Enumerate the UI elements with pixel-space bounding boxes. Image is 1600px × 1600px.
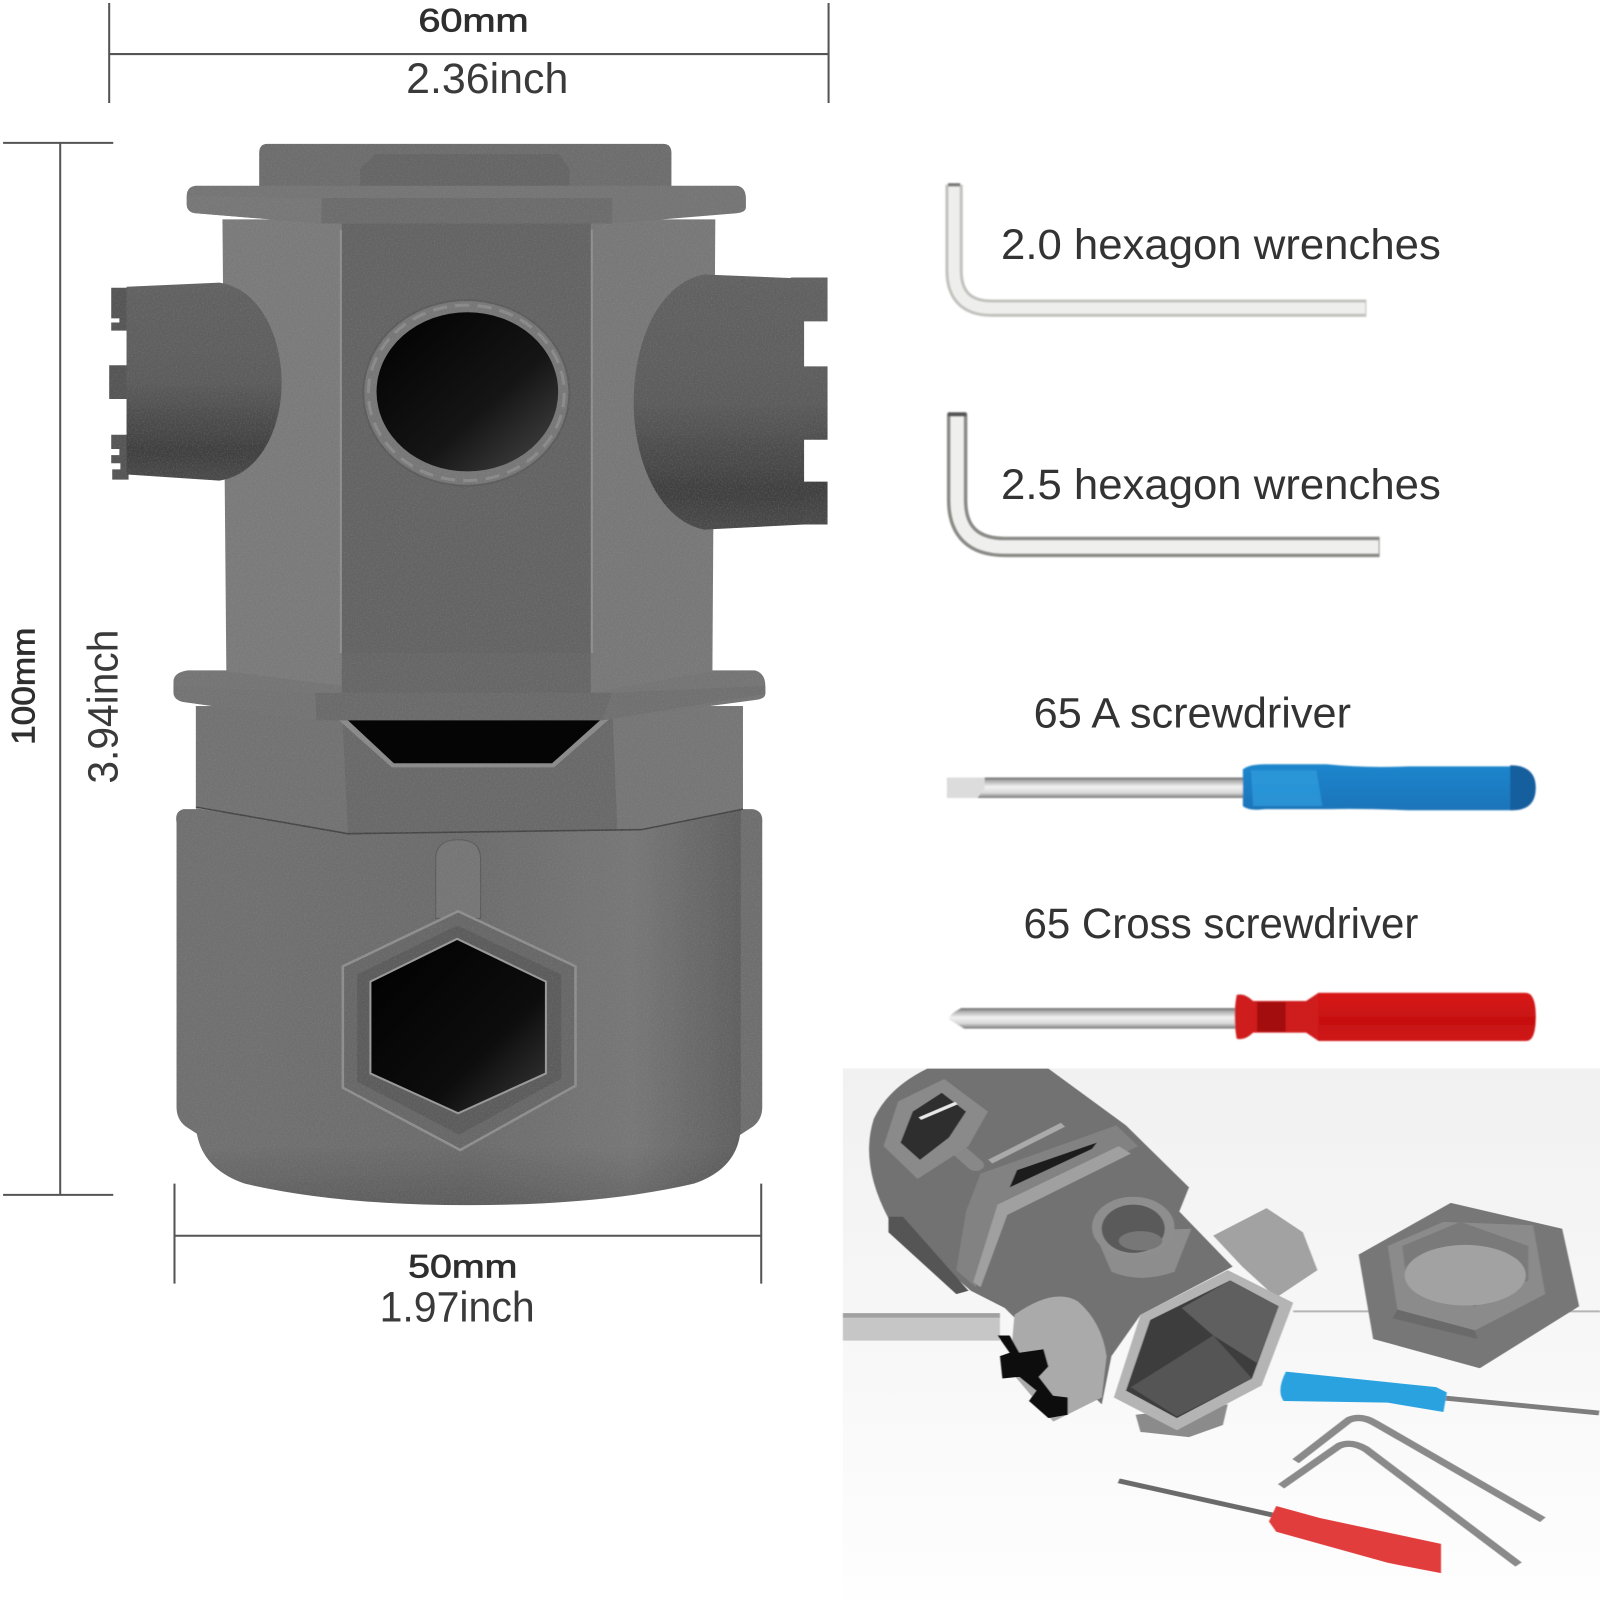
hexagon socket opening <box>370 939 546 1113</box>
label: 1.97inch: 1.97inch <box>380 1283 535 1331</box>
upper flange <box>187 186 746 223</box>
label: 65 Cross screwdriver: 65 Cross screwdriver <box>1023 900 1418 948</box>
photo inset: tool and accessories on white surface <box>843 1068 1600 1600</box>
label: 2.5 hexagon wrenches: 2.5 hexagon wrenches <box>1001 461 1441 509</box>
right arm <box>1213 1208 1317 1298</box>
label: 2.0 hexagon wrenches: 2.0 hexagon wrenches <box>1001 221 1441 269</box>
side ribs on lower cylinder <box>176 809 762 1136</box>
label: 50mm: 50mm <box>408 1248 517 1285</box>
lower cylinder <box>196 808 741 1205</box>
hex keys <box>1281 1418 1543 1565</box>
right arm back teeth <box>791 278 828 524</box>
dimension: 50mm width bottom <box>174 1184 761 1331</box>
blue screwdriver <box>1280 1372 1599 1413</box>
small hex socket <box>884 1079 988 1179</box>
label: 60mm: 60mm <box>418 2 529 39</box>
middle band <box>196 706 743 834</box>
wrench: 2.0 hexagon <box>948 185 1366 308</box>
lower arm <box>998 1296 1107 1422</box>
cross screwdriver <box>949 993 1536 1041</box>
wrench: 2.5 hexagon <box>948 413 1380 547</box>
center hole ring <box>363 300 569 486</box>
label: 2.36inch: 2.36inch <box>406 55 568 103</box>
top nut <box>259 144 671 192</box>
dimension: 60mm width top <box>109 2 829 103</box>
red screwdriver <box>1119 1481 1441 1573</box>
rib above hex <box>436 840 481 918</box>
left arm <box>109 283 282 481</box>
center hole opening <box>377 312 558 471</box>
label: 3.94inch: 3.94inch <box>79 630 127 784</box>
hexagon collar <box>343 911 576 1150</box>
hex opening <box>1114 1270 1293 1437</box>
top tube <box>1092 1197 1191 1278</box>
right arm <box>634 274 804 530</box>
loose nut <box>1359 1203 1579 1368</box>
tool body <box>869 1069 1233 1404</box>
label: 65 A screwdriver: 65 A screwdriver <box>1034 690 1351 738</box>
lower flange <box>173 653 765 720</box>
hex body faces <box>222 219 715 694</box>
flat screwdriver <box>947 764 1536 810</box>
surface edge <box>843 1311 1600 1341</box>
slot opening <box>348 720 600 763</box>
label: 100mm: 100mm <box>5 628 42 745</box>
dimension: 100mm height left <box>3 143 127 1195</box>
product: multi-purpose wrench body <box>109 144 828 1205</box>
